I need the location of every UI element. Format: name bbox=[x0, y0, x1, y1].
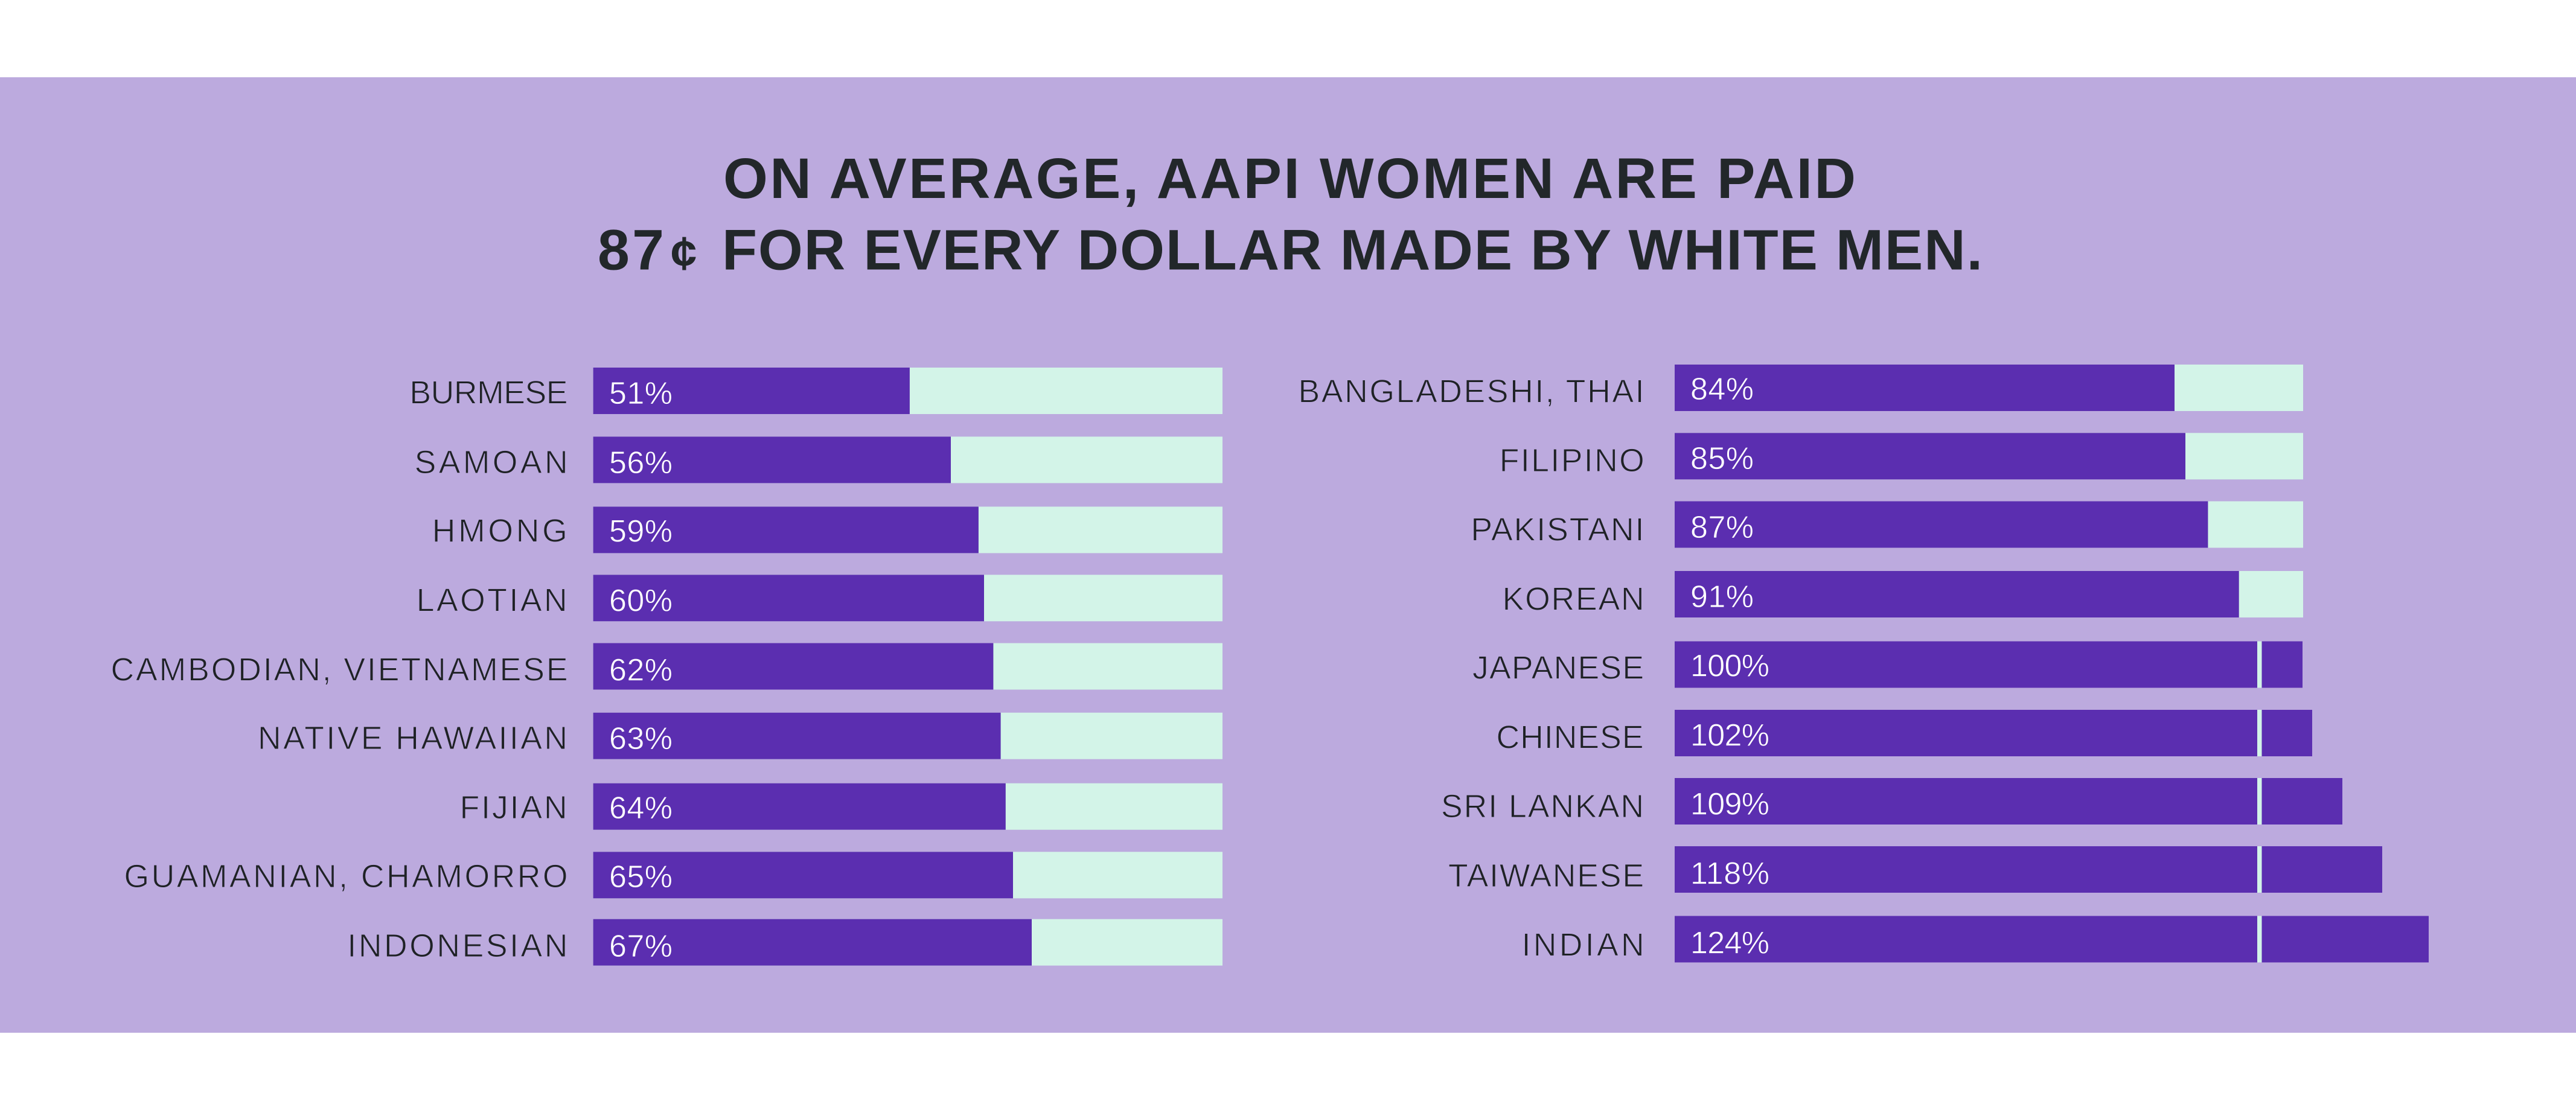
row: Chinese 102%: 102% bbox=[1690, 718, 1769, 753]
row: Pakistani 87%: PAKISTANI bbox=[1471, 512, 1644, 548]
row: Fijian 64%: FIJIAN bbox=[460, 790, 567, 826]
row: Indian 124%: INDIAN bbox=[1522, 927, 1644, 963]
row: Hmong 59%: 59% bbox=[609, 514, 673, 549]
row: Native Hawaiian 63%: 63% bbox=[609, 721, 673, 756]
row: Pakistani 87% bbox=[1471, 501, 2303, 548]
row: Native Hawaiian 63% bbox=[258, 713, 1222, 759]
title bbox=[598, 147, 1983, 282]
row: Chinese 102%: CHINESE bbox=[1496, 719, 1643, 756]
row: Bangladeshi, Thai 84%: BANGLADESHI, THAI bbox=[1298, 374, 1644, 409]
chart: left column, below 70 percent bbox=[111, 368, 1222, 966]
row: Guamanian, Chamorro 65%: GUAMANIAN, CHAMORRO bbox=[124, 859, 567, 895]
row: Guamanian, Chamorro 65% bbox=[124, 852, 1222, 898]
row: Korean 91%: 91% bbox=[1690, 579, 1754, 614]
row: Samoan 56%: SAMOAN bbox=[415, 445, 568, 480]
row: Hmong 59% bbox=[432, 506, 1222, 553]
row: Filipino 85%: 85% bbox=[1690, 441, 1754, 476]
title: 87 bbox=[598, 218, 664, 282]
row: Cambodian, Vietnamese 62%: 62% bbox=[609, 653, 673, 688]
title: ON AVERAGE, AAPI WOMEN ARE PAID bbox=[723, 147, 1856, 211]
row: Indonesian 67%: INDONESIAN bbox=[347, 928, 567, 964]
row: Samoan 56% bbox=[415, 436, 1222, 483]
row: Native Hawaiian 63%: NATIVE HAWAIIAN bbox=[258, 721, 567, 756]
row: Sri Lankan 109% bbox=[1441, 778, 2342, 825]
row: Laotian 60%: 60% bbox=[609, 584, 673, 619]
row: Japanese 100% bbox=[1472, 641, 2303, 688]
row: Filipino 85%: FILIPINO bbox=[1500, 443, 1644, 479]
row: Samoan 56%: 56% bbox=[609, 445, 673, 480]
title: ¢ bbox=[671, 227, 710, 280]
row: Laotian 60% bbox=[417, 575, 1222, 621]
row: Cambodian, Vietnamese 62%: CAMBODIAN, VIETNAMESE bbox=[111, 652, 567, 688]
row: Sri Lankan 109%: 109% bbox=[1690, 787, 1769, 822]
row: Korean 91% bbox=[1503, 571, 2303, 617]
row: Japanese 100%: JAPANESE bbox=[1472, 651, 1644, 686]
row: Indonesian 67% bbox=[347, 919, 1222, 966]
row: Chinese 102% bbox=[1496, 710, 2312, 756]
chart: right column, above 84 percent bbox=[1298, 365, 2429, 963]
row: Taiwanese 118% bbox=[1448, 846, 2382, 894]
row: Korean 91%: KOREAN bbox=[1503, 582, 1644, 617]
row: Taiwanese 118%: 118% bbox=[1690, 856, 1769, 891]
row: Fijian 64% bbox=[460, 783, 1222, 830]
row: Burmese 51%: BURMESE bbox=[409, 375, 567, 410]
row: Sri Lankan 109%: SRI LANKAN bbox=[1441, 789, 1644, 825]
row: Filipino 85% bbox=[1500, 433, 2303, 479]
row: Laotian 60%: LAOTIAN bbox=[417, 583, 567, 619]
row: Hmong 59%: HMONG bbox=[432, 513, 567, 549]
row: Indian 124%: 124% bbox=[1690, 926, 1769, 961]
row: Indian 124% bbox=[1522, 916, 2429, 963]
row: Burmese 51%: 51% bbox=[609, 376, 673, 411]
row: Pakistani 87%: 87% bbox=[1690, 510, 1754, 545]
row: Indonesian 67%: 67% bbox=[609, 929, 673, 964]
row: Taiwanese 118%: TAIWANESE bbox=[1448, 858, 1644, 894]
title: FOR EVERY DOLLAR MADE BY WHITE MEN. bbox=[722, 218, 1983, 282]
row: Bangladeshi, Thai 84% bbox=[1298, 365, 2303, 411]
row: Bangladeshi, Thai 84%: 84% bbox=[1690, 372, 1754, 407]
row: Fijian 64%: 64% bbox=[609, 791, 673, 826]
row: Cambodian, Vietnamese 62% bbox=[111, 643, 1222, 689]
row: Japanese 100%: 100% bbox=[1690, 648, 1769, 683]
row: Burmese 51% bbox=[409, 368, 1222, 414]
row: Guamanian, Chamorro 65%: 65% bbox=[609, 860, 673, 895]
